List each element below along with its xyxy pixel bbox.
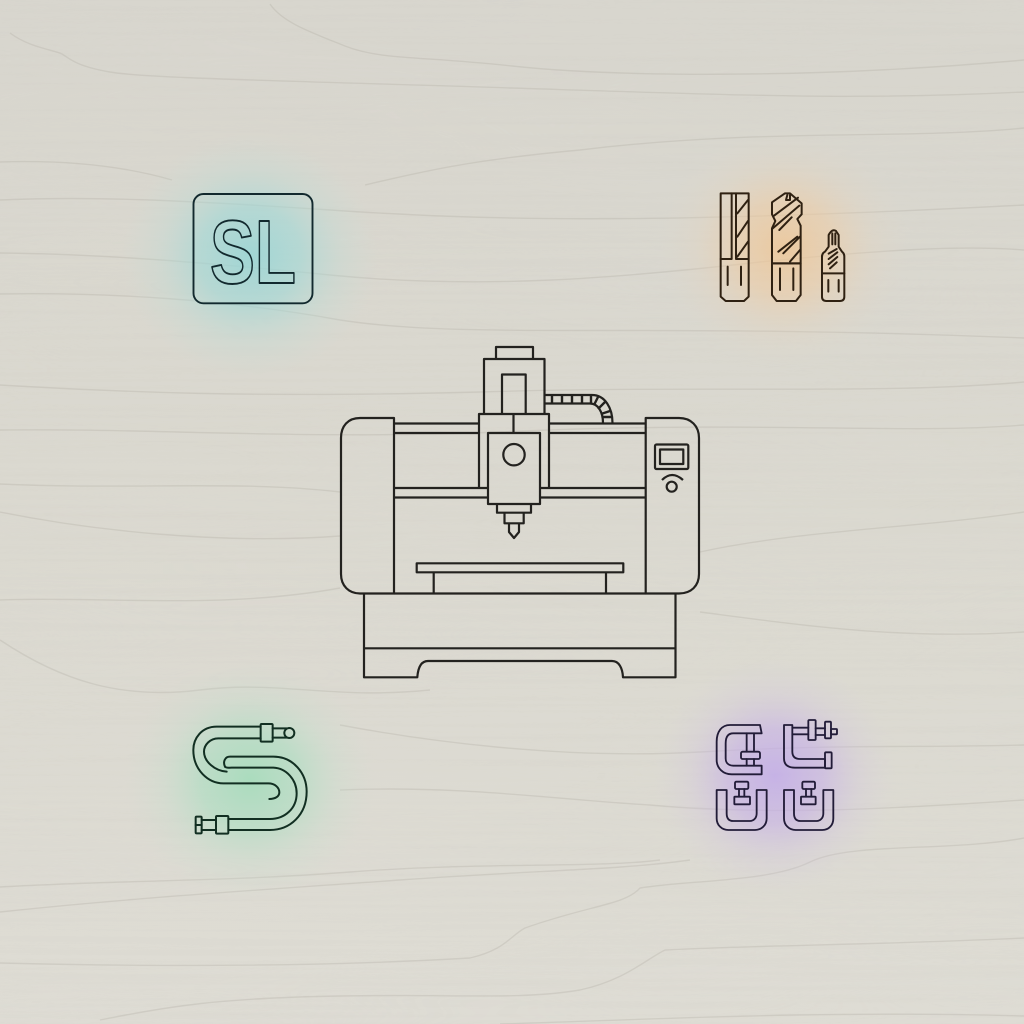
carriage plate	[479, 414, 549, 488]
glow: purple	[653, 658, 897, 894]
left column	[341, 418, 394, 594]
C-clamp	[717, 725, 762, 774]
icon: clamps	[717, 720, 837, 830]
spiral drill bit	[772, 193, 802, 301]
spindle motor top cap	[496, 347, 533, 358]
hose body	[193, 727, 307, 830]
icon: router bits	[721, 193, 844, 301]
Z-axis head housing	[484, 359, 544, 413]
glow: green	[125, 660, 375, 900]
machine base	[364, 594, 676, 677]
lower gantry rail	[394, 488, 646, 498]
right column	[646, 418, 699, 594]
glow: teal	[122, 134, 378, 378]
control panel	[655, 444, 688, 492]
straight end mill	[721, 193, 749, 301]
icon: SL badge	[194, 194, 312, 303]
SL lettering: SL	[210, 203, 296, 303]
F-clamp	[784, 720, 837, 768]
icon: flexible hose	[193, 724, 307, 834]
CNC router machine	[341, 347, 699, 677]
bottom fitting	[196, 816, 228, 834]
small V-bit	[822, 230, 844, 301]
top fitting	[261, 724, 294, 742]
U-clamp left	[717, 782, 767, 830]
cable chain	[545, 395, 612, 423]
work table	[417, 563, 623, 594]
glow: orange	[659, 130, 909, 366]
spindle collet and cutting bit	[497, 504, 531, 538]
U-clamp right	[784, 782, 833, 830]
upper gantry rail	[394, 424, 646, 433]
spindle block	[488, 414, 540, 504]
